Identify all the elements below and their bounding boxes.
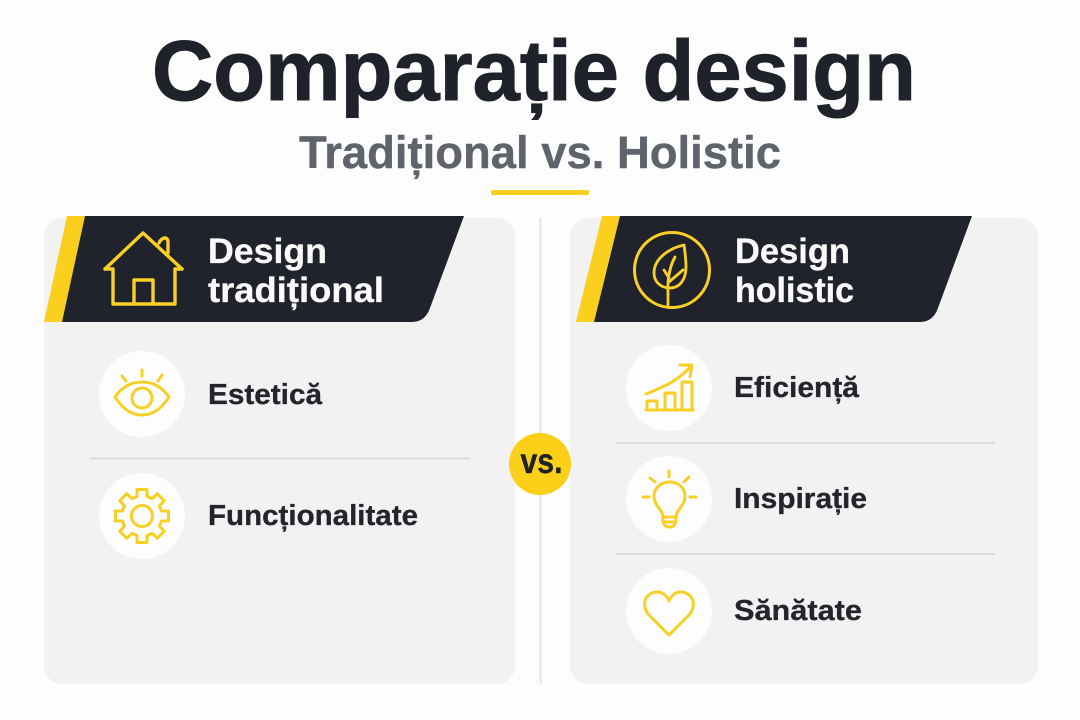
- panel: design holistic: [570, 216, 1038, 684]
- heading: tradițional: [208, 271, 384, 310]
- heading: holistic: [735, 271, 854, 310]
- icon: heart: [645, 592, 693, 635]
- vs badge: [509, 433, 571, 495]
- panel: design tradițional: [44, 216, 515, 684]
- panel background: [44, 218, 515, 684]
- item: Estetică: Estetică: [208, 379, 323, 411]
- heading: Design: [208, 232, 327, 271]
- item: Funcționalitate: [99, 473, 418, 559]
- item: Inspirație: Inspirație: [734, 483, 867, 515]
- icon: eye: [115, 370, 169, 415]
- icon: gear: [115, 489, 169, 543]
- icon: house: [105, 233, 182, 304]
- item: Inspirație: [626, 456, 867, 542]
- item: Sănătate: [626, 568, 862, 654]
- title: Comparație design: [152, 24, 916, 120]
- item: Estetică: [99, 351, 323, 437]
- heading: [735, 232, 854, 310]
- item: Eficiență: [626, 345, 860, 431]
- heading: Design: [735, 232, 850, 271]
- header banner: [44, 216, 464, 322]
- item: Eficiență: Eficiență: [734, 372, 860, 404]
- panel background: [570, 218, 1038, 684]
- header banner: [576, 216, 972, 322]
- icon: light bulb: [643, 471, 696, 527]
- icon: leaf in circle: [634, 232, 710, 308]
- item: Funcționalitate: Funcționalitate: [208, 500, 418, 532]
- icon: growth chart: [646, 365, 693, 410]
- subtitle: Tradițional vs. Holistic: [299, 127, 781, 178]
- vs badge: vs.: [520, 442, 562, 481]
- heading: [208, 232, 384, 310]
- item: Sănătate: Sănătate: [734, 595, 862, 627]
- title accent line: [491, 190, 589, 195]
